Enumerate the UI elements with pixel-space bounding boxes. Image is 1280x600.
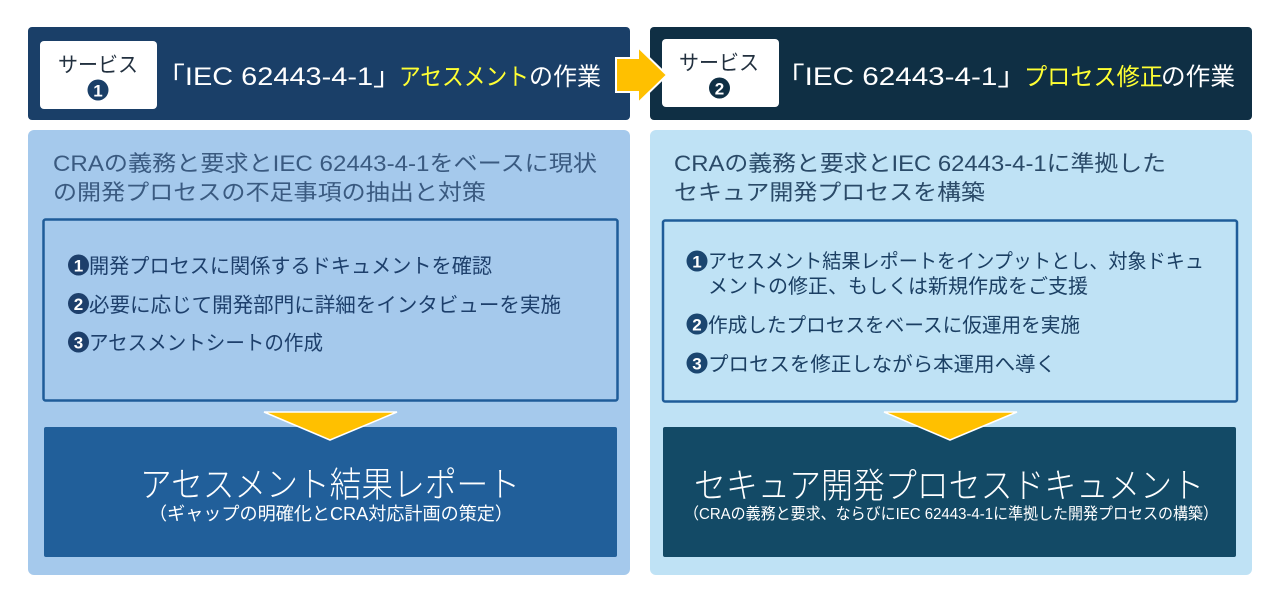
service 1 summary: の開発プロセスの不足事項の抽出と対策	[53, 180, 486, 205]
service 2 summary: CRAの義務と要求とIEC 62443-4-1に準拠した	[674, 151, 1166, 176]
service 1 title: アセスメント	[399, 64, 529, 91]
service 1 steps box	[44, 220, 618, 400]
service 1 title	[156, 63, 601, 91]
service 1 result box: （ギャップの明確化とCRA対応計画の策定）	[149, 504, 513, 524]
service 2 title: の作業	[1161, 63, 1235, 91]
panel: service 2 body	[650, 130, 1252, 575]
step 1: メントの修正、もしくは新規作成をご支援	[708, 275, 1088, 298]
service 1 badge: サービス	[58, 54, 138, 77]
step 1	[686, 250, 1204, 298]
panel: service 2 header	[650, 27, 1252, 120]
panel: service 1 header	[28, 27, 630, 120]
service 2 title: プロセス修正	[1024, 64, 1163, 91]
step 1: 1	[74, 256, 83, 276]
arrow: down to process document	[884, 412, 1017, 440]
step 2: 作成したプロセスをベースに仮運用を実施	[708, 314, 1080, 337]
service 1 title: 「IEC 62443-4-1」	[156, 63, 402, 91]
service 1 title: の作業	[529, 63, 601, 91]
step 1: 1	[692, 252, 702, 272]
step 3: 3	[74, 334, 83, 352]
service 2 summary: セキュア開発プロセスを構築	[674, 180, 985, 205]
panel: service 1 body	[28, 130, 630, 575]
service 2 title: 「IEC 62443-4-1」	[775, 63, 1027, 91]
service 2 result box	[663, 427, 1236, 557]
step 3: アセスメントシートの作成	[89, 332, 323, 355]
step 2: 必要に応じて開発部門に詳細をインタビューを実施	[89, 294, 561, 317]
step 2: 2	[74, 295, 83, 314]
service 1 badge	[40, 41, 157, 109]
step 2: 2	[692, 316, 702, 334]
service 2 result box: セキュア開発プロセスドキュメント	[694, 467, 1204, 506]
arrow: down to report	[264, 412, 397, 440]
service 1 summary: CRAの義務と要求とIEC 62443-4-1をベースに現状	[53, 151, 597, 176]
service 1 result box	[44, 427, 617, 557]
service 2 badge	[662, 39, 779, 107]
step 3: プロセスを修正しながら本運用へ導く	[708, 353, 1056, 376]
step 1: 開発プロセスに関係するドキュメントを確認	[89, 255, 492, 278]
service 2 title	[775, 63, 1235, 91]
step 1: アセスメント結果レポートをインプットとし、対象ドキュ	[708, 250, 1204, 273]
service 2 badge: サービス	[679, 52, 759, 75]
service 1 result box: アセスメント結果レポート	[140, 466, 520, 505]
service 1 badge: 1	[93, 82, 103, 100]
service 2 badge: 2	[715, 80, 724, 98]
service 2 steps box	[663, 220, 1237, 402]
step 3: 3	[692, 354, 702, 374]
arrow: service 1 to service 2	[616, 47, 667, 103]
service 2 result box: （CRAの義務と要求、ならびにIEC 62443-4-1に準拠した開発プロセスの構築）	[684, 505, 1218, 523]
